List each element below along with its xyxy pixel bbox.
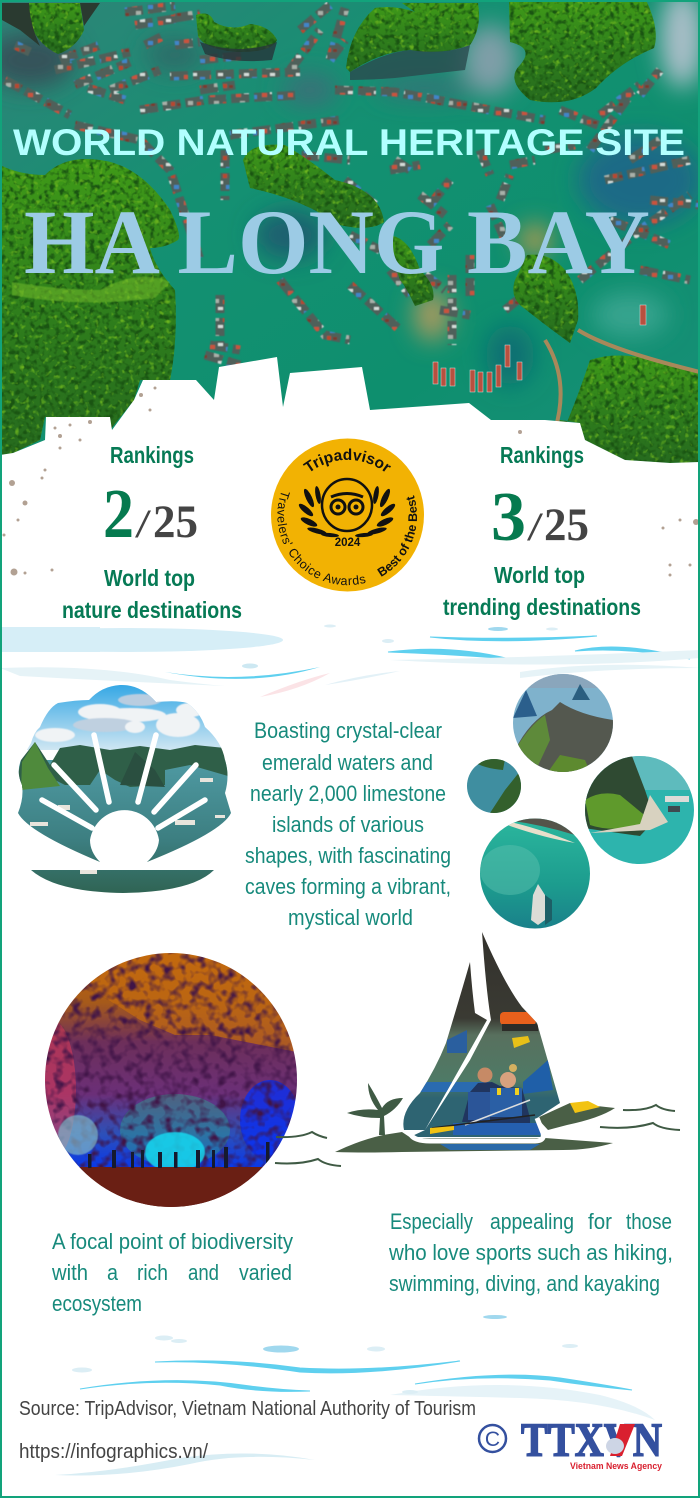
cruise boats <box>30 778 225 874</box>
rank number 3 of 25: 25 <box>544 499 589 551</box>
torn white paper edge <box>0 357 700 480</box>
source credit: Source: TripAdvisor, Vietnam National Authority of Tourism <box>19 1398 476 1420</box>
description: emerald waters: emerald waters and <box>262 750 433 775</box>
limestone islands <box>0 0 700 463</box>
agency name: Vietnam News Agency <box>570 1461 663 1472</box>
ttxvn logo: C <box>485 1428 500 1451</box>
rank number 3 of 25: / <box>527 504 544 549</box>
badge arc text: Travelers' Choice Awards <box>277 492 366 586</box>
left ranking panel <box>62 442 242 623</box>
red v and globe <box>610 1424 635 1456</box>
description: emerald waters: mystical world <box>288 905 413 930</box>
photo circle: limestone peak <box>513 674 613 772</box>
description: sports: appealing <box>490 1209 574 1234</box>
copyright mark <box>479 1425 506 1452</box>
owl logo with laurels <box>297 479 397 538</box>
description: biodiversity: rich <box>137 1260 168 1285</box>
description: sports: Especially <box>390 1209 473 1234</box>
shaded water patches <box>0 0 700 385</box>
floating fishing villages <box>5 5 700 365</box>
rank number 2 of 25 <box>103 476 198 553</box>
palm tree <box>347 1083 403 1135</box>
description: biodiversity: A focal point of biodiversity <box>52 1229 293 1254</box>
rankings heading: Rankings <box>500 442 584 468</box>
rank number 2 of 25: 2 <box>103 476 134 553</box>
photo circle: cliff over water <box>467 759 521 813</box>
left ranking panel: nature destinations <box>62 597 242 623</box>
sailboat-shaped kayaking photo <box>335 930 615 1152</box>
description: biodiversity: with <box>51 1260 88 1285</box>
title: world natural heritage site: WORLD NATURAL HERITAGE SITE <box>13 121 685 163</box>
seagulls <box>275 1105 680 1166</box>
rank number 3 of 25: 3 <box>491 479 526 556</box>
sunlit upper slope of the left island <box>12 277 170 302</box>
description: sports <box>388 1209 673 1296</box>
hull water strip <box>440 1144 540 1150</box>
description: sports: who love sports such as hiking, <box>388 1240 673 1265</box>
ttxvn logo <box>479 1414 663 1472</box>
website: https://infographics.vn/ <box>19 1441 208 1463</box>
description: sports: for <box>588 1209 612 1234</box>
rank number 3 of 25 <box>491 479 589 556</box>
bright cave light <box>145 1132 205 1172</box>
kayakers <box>462 1082 530 1125</box>
photo circle: island and beach <box>583 755 696 865</box>
moored boats <box>433 305 646 392</box>
description: emerald waters: caves forming a vibrant, <box>245 874 451 899</box>
rankings heading: Rankings <box>110 442 194 468</box>
clouds <box>35 694 204 742</box>
description: sports: swimming, diving, and kayaking <box>389 1271 660 1296</box>
description: biodiversity: a <box>107 1260 119 1285</box>
right ranking panel <box>443 442 641 620</box>
title: ha long bay: HA LONG BAY <box>24 191 650 293</box>
description: emerald waters <box>245 718 451 930</box>
description: emerald waters: nearly 2,000 limestone <box>250 781 446 806</box>
rank number 2 of 25: / <box>135 501 152 546</box>
hero aerial photo of the bay <box>0 0 700 480</box>
description: emerald waters: shapes, with fascinating <box>245 843 451 868</box>
right ranking panel: trending destinations <box>443 594 641 620</box>
silhouettes of walkers <box>88 1142 270 1168</box>
cave walls with stalactite texture <box>45 953 297 1207</box>
description: emerald waters: islands of various <box>272 812 424 837</box>
label: World top <box>494 562 585 588</box>
badge arc text <box>277 448 417 586</box>
water wave decoration at bottom <box>55 1315 655 1476</box>
cave floor <box>79 1167 263 1207</box>
description: biodiversity: and <box>188 1260 219 1285</box>
label: World top <box>104 565 195 591</box>
wordmark: TTXVN <box>521 1414 662 1467</box>
sandy shoreline <box>545 330 700 430</box>
cave photo circle <box>45 953 297 1207</box>
rank number 2 of 25: 25 <box>153 496 198 548</box>
yellow paddle and shaft <box>432 1115 535 1128</box>
description: biodiversity: ecosystem <box>52 1291 142 1316</box>
white hull stripe <box>411 1118 543 1141</box>
description: biodiversity <box>51 1229 293 1316</box>
description: sports: those <box>626 1209 672 1234</box>
island silhouette <box>335 1103 615 1152</box>
orange raft and yellow paddle <box>500 1012 536 1025</box>
shell-shaped bay photo with sunrise <box>18 685 231 893</box>
description: emerald waters: Boasting crystal-clear <box>254 718 442 743</box>
photo circle: turquoise bay and boat <box>478 817 592 931</box>
water wave decoration under rankings <box>0 624 700 697</box>
dark rock at top-left corner <box>2 3 100 46</box>
shadowed island undersides <box>200 42 277 61</box>
sunrise rays <box>42 735 205 828</box>
badge arc text: 2024 <box>335 537 361 549</box>
karst mountains <box>15 742 235 790</box>
background kayaks <box>447 1030 467 1053</box>
description: biodiversity: varied <box>239 1260 292 1285</box>
paper speckles <box>2 386 699 576</box>
sails with photo <box>395 930 565 1140</box>
badge arc text: Best of the Best <box>377 495 417 577</box>
sun <box>90 810 159 862</box>
badge arc text: Tripadvisor <box>302 448 391 472</box>
